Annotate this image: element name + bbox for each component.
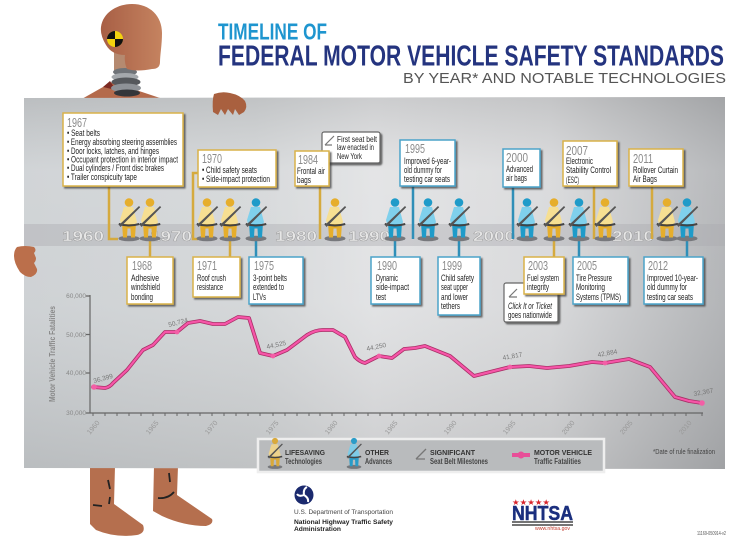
seat icons: lifesaving	[118, 198, 678, 241]
callout: 2003: integrity	[527, 282, 549, 293]
data labels: 44,250	[366, 342, 387, 353]
legend: other: OTHER	[365, 448, 390, 457]
callout: 1971	[193, 257, 240, 297]
y axis labels	[66, 293, 86, 417]
logo: US DOT: National Highway Traffic Safety	[294, 519, 393, 526]
callout: 1970: • Child safety seats	[202, 165, 257, 176]
callout: 2012: Improved 10-year-	[647, 273, 698, 284]
callout: 2003: 2003	[528, 258, 548, 273]
callout: 2000: Advanced	[506, 164, 533, 175]
legend: lifesaving: Technologies	[285, 457, 322, 466]
document code: 11169-050914-v2	[697, 531, 726, 537]
callout: 1967: • Trailer conspicuity tape	[67, 172, 137, 183]
callout: 1967: 1967	[67, 115, 87, 130]
callout: 2007: Stability Control	[566, 165, 611, 176]
legend: lifesaving: LIFESAVING	[285, 448, 325, 457]
callout: 2007: (ESC)	[566, 175, 579, 186]
data labels: 50,724	[168, 317, 189, 329]
legend: fatalities: MOTOR VEHICLE	[534, 448, 592, 457]
decade labels: 1960	[62, 228, 104, 245]
callout: Click It or Ticket	[504, 283, 558, 322]
callout: 2011: 2011	[633, 151, 653, 166]
x axis labels: 1985	[384, 420, 400, 436]
y axis labels: 40,000	[66, 370, 86, 377]
data labels: 44,525	[266, 340, 287, 351]
x axis labels: 1975	[265, 420, 281, 436]
callout: 2005: Tire Pressure	[576, 273, 612, 284]
callout: 2007: Electronic	[566, 156, 593, 167]
callout: 1975: 1975	[254, 258, 274, 273]
callout: 1967: • Energy absorbing steering assemblies	[67, 137, 177, 148]
callout: 2005	[573, 257, 628, 304]
x axis labels: 1990	[443, 420, 459, 436]
data labels	[93, 317, 714, 398]
callout: 1967: • Door locks, latches, and hinges	[67, 146, 159, 157]
legend: seat belt milestones: SIGNIFICANT	[430, 448, 475, 457]
logo: US DOT	[294, 486, 393, 533]
axes	[86, 295, 703, 413]
callout: 2003	[524, 257, 564, 294]
x axis labels: 2005	[619, 420, 635, 436]
callout: 2007: 2007	[566, 143, 588, 158]
crash test dummy	[80, 4, 172, 102]
callout: 2005: 2005	[577, 258, 597, 273]
callout: 1984: 1984	[298, 152, 318, 167]
x axis labels: 2000	[561, 420, 577, 436]
legend: fatalities: Traffic Fatalities	[534, 457, 581, 466]
callout: 2003: Fuel system	[527, 273, 559, 284]
callout: 2005: Monitoring	[576, 282, 605, 293]
callout: 1984: bags	[297, 175, 311, 186]
x axis labels: 2010	[678, 420, 694, 436]
callout: 1967: • Dual cylinders / Front disc brakes	[67, 163, 164, 174]
dummy shoulders	[80, 82, 172, 102]
data labels: 42,884	[597, 349, 618, 359]
callout: 1970: • Side-impact protection	[202, 174, 270, 185]
logo: NHTSA: NHTSA	[512, 503, 573, 525]
callout: 1999: and lower	[441, 292, 468, 303]
fatalities line	[93, 317, 702, 403]
callout: 1999: seat upper	[441, 282, 468, 293]
callout: 1967: • Seat belts	[67, 128, 100, 139]
subtitle: BY YEAR* AND NOTABLE TECHNOLOGIES	[403, 70, 726, 87]
legend: fatalities	[512, 448, 592, 466]
callout: 2012: 2012	[648, 258, 668, 273]
logo: US DOT: Administration	[294, 526, 341, 533]
callout: 1975: extended to	[253, 282, 284, 293]
callout: 1999: tethers	[441, 301, 460, 312]
callout: 1968: bonding	[131, 292, 153, 303]
y axis labels: 60,000	[66, 293, 86, 300]
decade labels: 2000	[473, 228, 515, 245]
data labels: 36,399	[93, 373, 114, 385]
callout: 2011: Rollover Curtain	[633, 165, 678, 176]
callout: 1995	[400, 140, 455, 186]
callout: 1970	[198, 150, 276, 187]
callout: 1971: Roof crush	[197, 273, 226, 284]
legend: seat belt milestones	[416, 448, 488, 466]
callout: 1999: 1999	[442, 258, 462, 273]
callout: 2007	[563, 141, 617, 186]
title	[218, 18, 726, 87]
callout: 1975: 3-point belts	[253, 273, 287, 284]
crash target marker	[107, 31, 123, 47]
callout: 1968: Adhesive	[131, 273, 159, 284]
y axis labels: 30,000	[66, 410, 86, 417]
callout: 1990: Dynamic	[376, 273, 398, 284]
callout: 1971: resistance	[197, 282, 223, 293]
callout: 1999	[438, 257, 480, 315]
decade labels: 1990	[348, 228, 390, 245]
legend: seat belt milestones: Seat Belt Milestones	[430, 457, 488, 466]
left leg	[90, 466, 144, 536]
callout: 2011	[629, 149, 683, 186]
seat icons: other advances	[246, 198, 698, 241]
right leg	[153, 466, 212, 526]
callout: 1968: 1968	[132, 258, 152, 273]
callout: 2005: Systems (TPMS)	[576, 292, 621, 303]
dummy legs and feet	[90, 466, 212, 536]
callout: 1995: old dummy for	[404, 165, 442, 176]
dummy head	[101, 4, 162, 70]
decade labels: 1980	[275, 228, 317, 245]
line chart: traffic fatalities	[47, 293, 714, 436]
callout: 2000: 2000	[506, 150, 528, 165]
callout: 1990: side-impact	[376, 282, 409, 293]
data markers	[91, 330, 705, 406]
callout: 2012: testing car seats	[647, 292, 693, 303]
x axis labels: 1965	[145, 420, 161, 436]
logo: NHTSA: www.nhtsa.gov	[535, 526, 571, 532]
title line 1: TIMELINE OF	[218, 18, 327, 44]
y axis title: Motor Vehicle Traffic Fatalities	[47, 306, 57, 402]
connector lines	[109, 173, 687, 257]
dummy neck	[111, 52, 141, 96]
panel: timeline board	[24, 97, 725, 469]
callout: 2000: air bags	[506, 173, 527, 184]
callout: Click It or Ticket: goes nationwide	[508, 310, 552, 321]
callout: 1967: • Occupant protection in interior impact	[67, 154, 178, 166]
decade labels: 1970	[150, 228, 192, 245]
x axis labels	[86, 420, 694, 436]
callout: 1984	[295, 151, 329, 186]
x axis labels: 1960	[86, 420, 102, 436]
legend	[258, 438, 604, 472]
logo: US DOT: U.S. Department of Transportation	[294, 510, 393, 516]
legend: other	[347, 438, 392, 469]
timeline band	[24, 224, 725, 246]
callout: 1984: Frontal air	[297, 166, 325, 177]
callout: 1990: 1990	[377, 258, 397, 273]
callout: 2000	[503, 149, 540, 187]
callout: first seat belt law: New York	[337, 151, 363, 161]
callout: 2011: Air Bags	[633, 174, 657, 185]
callout: 1970: 1970	[202, 151, 222, 166]
callout: 1975: LTVs	[253, 292, 266, 303]
data labels: 41,817	[502, 352, 523, 362]
data labels: 32,367	[693, 388, 714, 398]
hand: top	[213, 92, 246, 115]
callout: 1968	[127, 257, 173, 304]
callout: 1968: windshield	[130, 282, 160, 293]
callout: 1999: Child safety	[441, 273, 474, 284]
callout: first seat belt law: First seat belt	[337, 134, 377, 144]
hand: left	[14, 246, 37, 277]
decade labels: 2010	[612, 228, 654, 245]
callout: first seat belt law	[322, 132, 380, 163]
callout: 1995: Improved 6-year-	[404, 156, 451, 167]
callout: Click It or Ticket: Click It or Ticket	[508, 301, 552, 312]
callout: 1990	[371, 257, 420, 304]
callout: 1967	[63, 113, 183, 186]
decade labels	[62, 228, 654, 245]
x axis labels: 1970	[204, 420, 220, 436]
x axis labels: 1980	[324, 420, 340, 436]
x axis labels: 1995	[502, 420, 518, 436]
callout: 1971: 1971	[197, 258, 217, 273]
callout: 1975	[249, 257, 303, 304]
footnote: *Date of rule finalization	[653, 447, 715, 456]
logo: NHTSA: ★★★★★	[512, 498, 550, 507]
legend: other: Advances	[365, 457, 392, 466]
callout: 2012	[644, 257, 703, 304]
y axis labels: 50,000	[66, 332, 86, 339]
legend: lifesaving	[268, 438, 325, 469]
callout: 2012: old dummy for	[647, 282, 687, 293]
callout: 1990: test	[376, 292, 386, 303]
callout: 1995: testing car seats	[404, 174, 450, 185]
logo: NHTSA	[512, 498, 573, 532]
callout: first seat belt law: law enacted in	[337, 142, 374, 152]
callout: 1995: 1995	[405, 141, 425, 156]
